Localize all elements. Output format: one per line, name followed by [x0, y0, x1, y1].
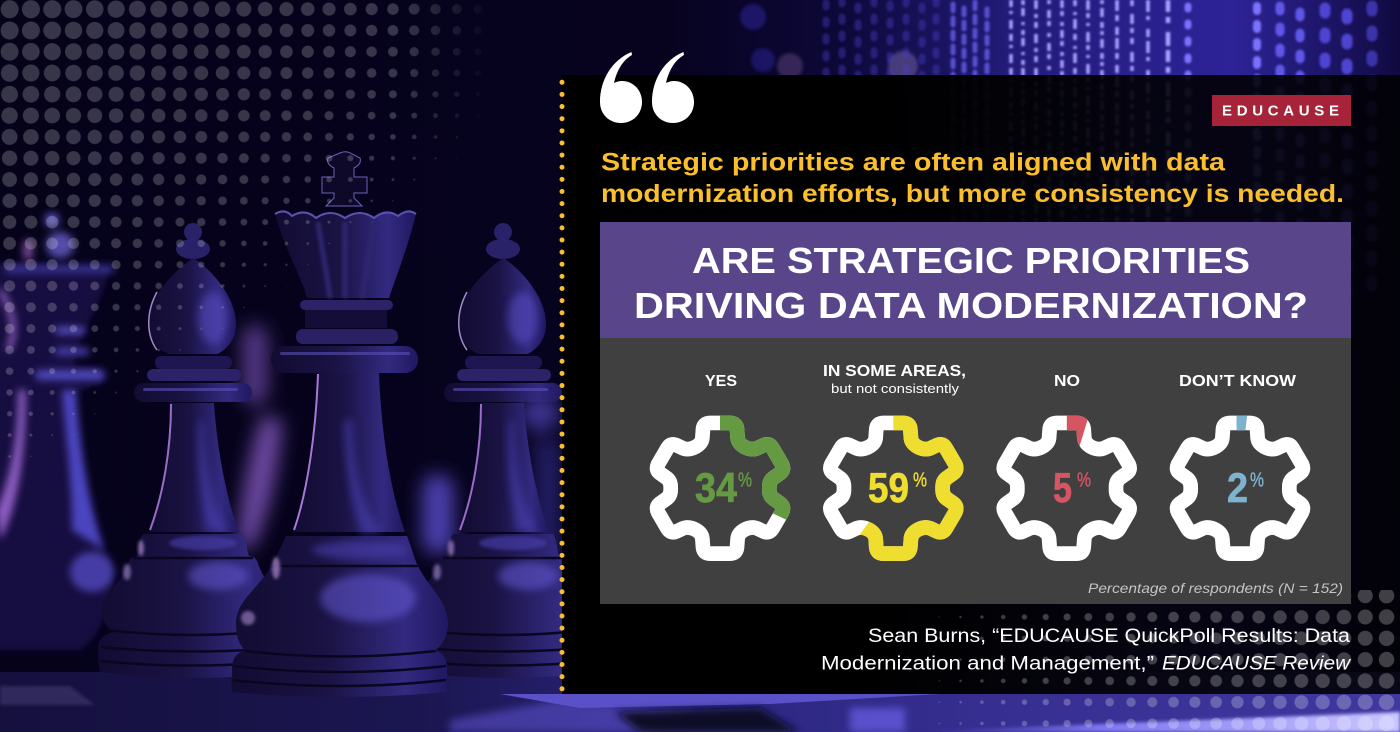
dotted yellow vertical line: [560, 82, 564, 694]
gauge: yes 34%: 34: [695, 464, 738, 511]
citation: [821, 625, 1352, 674]
blurred queen on the left: [0, 213, 115, 650]
gauge: no 5%: [1004, 423, 1130, 554]
data wall glow: [740, 4, 918, 81]
label: don't know: DON’T KNOW: [1179, 373, 1297, 390]
label: no: NO: [1054, 373, 1080, 390]
gauge: in some areas 59%: [830, 423, 956, 554]
gauge: don't know 2%: %: [1250, 470, 1264, 492]
matrix code columns: [826, 0, 1372, 300]
halftone dots: bottom right: [880, 590, 1400, 732]
halftone dots: top left: [0, 0, 478, 478]
note: sample size: Percentage of respondents (N = 152): [1088, 580, 1343, 596]
citation: Modernization and Management,”: [821, 652, 1154, 674]
panel: title: [600, 222, 1351, 338]
headline: Strategic priorities are often aligned with data: [601, 148, 1226, 176]
black quote panel backdrop: [562, 75, 1400, 694]
king: [232, 152, 448, 697]
gauge: don't know 2%: [1177, 423, 1303, 554]
floor: [0, 672, 1400, 732]
gauge: don't know 2%: 2: [1227, 464, 1248, 511]
gauge: no 5%: %: [1077, 470, 1091, 492]
bishop left: [98, 223, 288, 678]
citation: EDUCAUSE Review: [1162, 652, 1352, 674]
logo: EDUCAUSE: EDUCAUSE: [1222, 102, 1339, 120]
headline: modernization efforts, but more consistency is needed.: [601, 180, 1344, 208]
citation: Sean Burns, “EDUCAUSE QuickPoll Results: Data: [868, 625, 1350, 647]
infographic content layer: [560, 52, 1352, 692]
headline: [601, 148, 1344, 208]
icon: quotation mark: [600, 52, 694, 123]
logo: EDUCAUSE: [1212, 95, 1351, 126]
gauge: no 5%: 5: [1053, 464, 1072, 511]
label: in some areas: but not consistently: [831, 381, 960, 396]
label: in some areas: [823, 363, 966, 396]
label: in some areas: IN SOME AREAS,: [823, 363, 966, 380]
panel: title: ARE STRATEGIC PRIORITIES: [692, 240, 1250, 281]
blurred background purple shapes: [238, 325, 560, 570]
panel: title: DRIVING DATA MODERNIZATION?: [634, 285, 1308, 326]
panel: poll results: [600, 338, 1351, 604]
gauge: yes 34%: [657, 423, 783, 554]
label: yes: YES: [705, 373, 737, 390]
gauge: yes 34%: %: [738, 470, 752, 492]
gauge: in some areas 59%: 59: [868, 464, 909, 511]
gauge: in some areas 59%: %: [913, 470, 927, 492]
bishop right: [408, 223, 598, 678]
